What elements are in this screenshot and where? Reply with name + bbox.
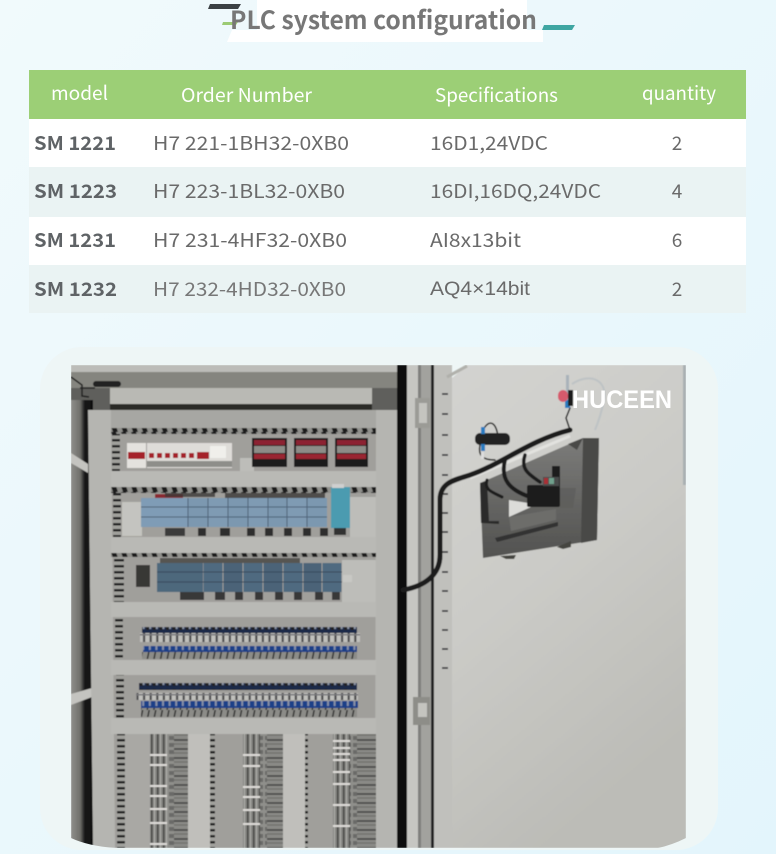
PLC rack 1 xyxy=(141,493,328,536)
table header: Specifications xyxy=(435,81,558,108)
row: SM 1221: 2 xyxy=(672,129,682,156)
terminal block row 2 xyxy=(136,683,358,717)
row: SM 1232: H7 232-4HD32-0XB0 xyxy=(153,275,346,302)
mounting frame xyxy=(88,410,399,848)
row: SM 1231: SM 1231 xyxy=(34,226,116,253)
PLC rack 2 xyxy=(136,558,352,600)
watermark: HUCEEN: HUCEEN xyxy=(572,386,672,414)
row: SM 1231: AI8x13bit xyxy=(430,226,521,253)
row: SM 1221: 16D1,24VDC xyxy=(430,129,548,156)
row: SM 1232: 2 xyxy=(672,275,682,302)
title accent: teal bar xyxy=(542,25,575,30)
row: SM 1232: AQ4×14bit xyxy=(430,279,531,300)
touch screen xyxy=(470,436,599,559)
table header: model xyxy=(51,79,108,106)
row: SM 1232 xyxy=(29,265,746,313)
row: SM 1223: H7 223-1BL32-0XB0 xyxy=(153,177,345,204)
row: SM 1223: SM 1223 xyxy=(34,177,117,204)
table header: Order Number xyxy=(181,81,313,108)
back plate xyxy=(111,428,376,848)
row: SM 1231: 6 xyxy=(672,226,682,253)
lower terminal strips xyxy=(125,734,376,848)
row: SM 1223 xyxy=(29,167,746,217)
title xyxy=(208,0,575,42)
row: SM 1221 xyxy=(29,119,746,167)
title accent: dark bar xyxy=(208,4,241,9)
title text: PLC system configuration xyxy=(230,1,537,37)
photo backing panel xyxy=(40,347,718,850)
row: SM 1231 xyxy=(29,217,746,265)
title accent: green tick xyxy=(222,22,238,25)
table header xyxy=(29,70,746,119)
door cables xyxy=(403,408,570,590)
row: SM 1221: H7 221-1BH32-0XB0 xyxy=(153,129,349,156)
photo: PLC control cabinet xyxy=(71,365,686,848)
table header: quantity xyxy=(642,79,716,106)
row: SM 1231: H7 231-4HF32-0XB0 xyxy=(153,226,347,253)
row: SM 1232: SM 1232 xyxy=(34,275,117,302)
row: SM 1223: 4 xyxy=(672,177,682,204)
cable sleeve and connectors xyxy=(475,375,605,459)
power relays xyxy=(252,438,368,467)
row: SM 1223: 16DI,16DQ,24VDC xyxy=(430,177,601,204)
door hinge side xyxy=(397,365,452,848)
cabinet interior xyxy=(71,365,407,848)
specification table xyxy=(29,70,746,313)
row: SM 1221: SM 1221 xyxy=(34,129,116,156)
cabinet door xyxy=(442,365,686,848)
power supply module xyxy=(331,484,350,535)
wiring duct slots xyxy=(111,428,376,848)
circuit breakers xyxy=(127,443,232,468)
terminal block row 1 xyxy=(140,627,360,659)
